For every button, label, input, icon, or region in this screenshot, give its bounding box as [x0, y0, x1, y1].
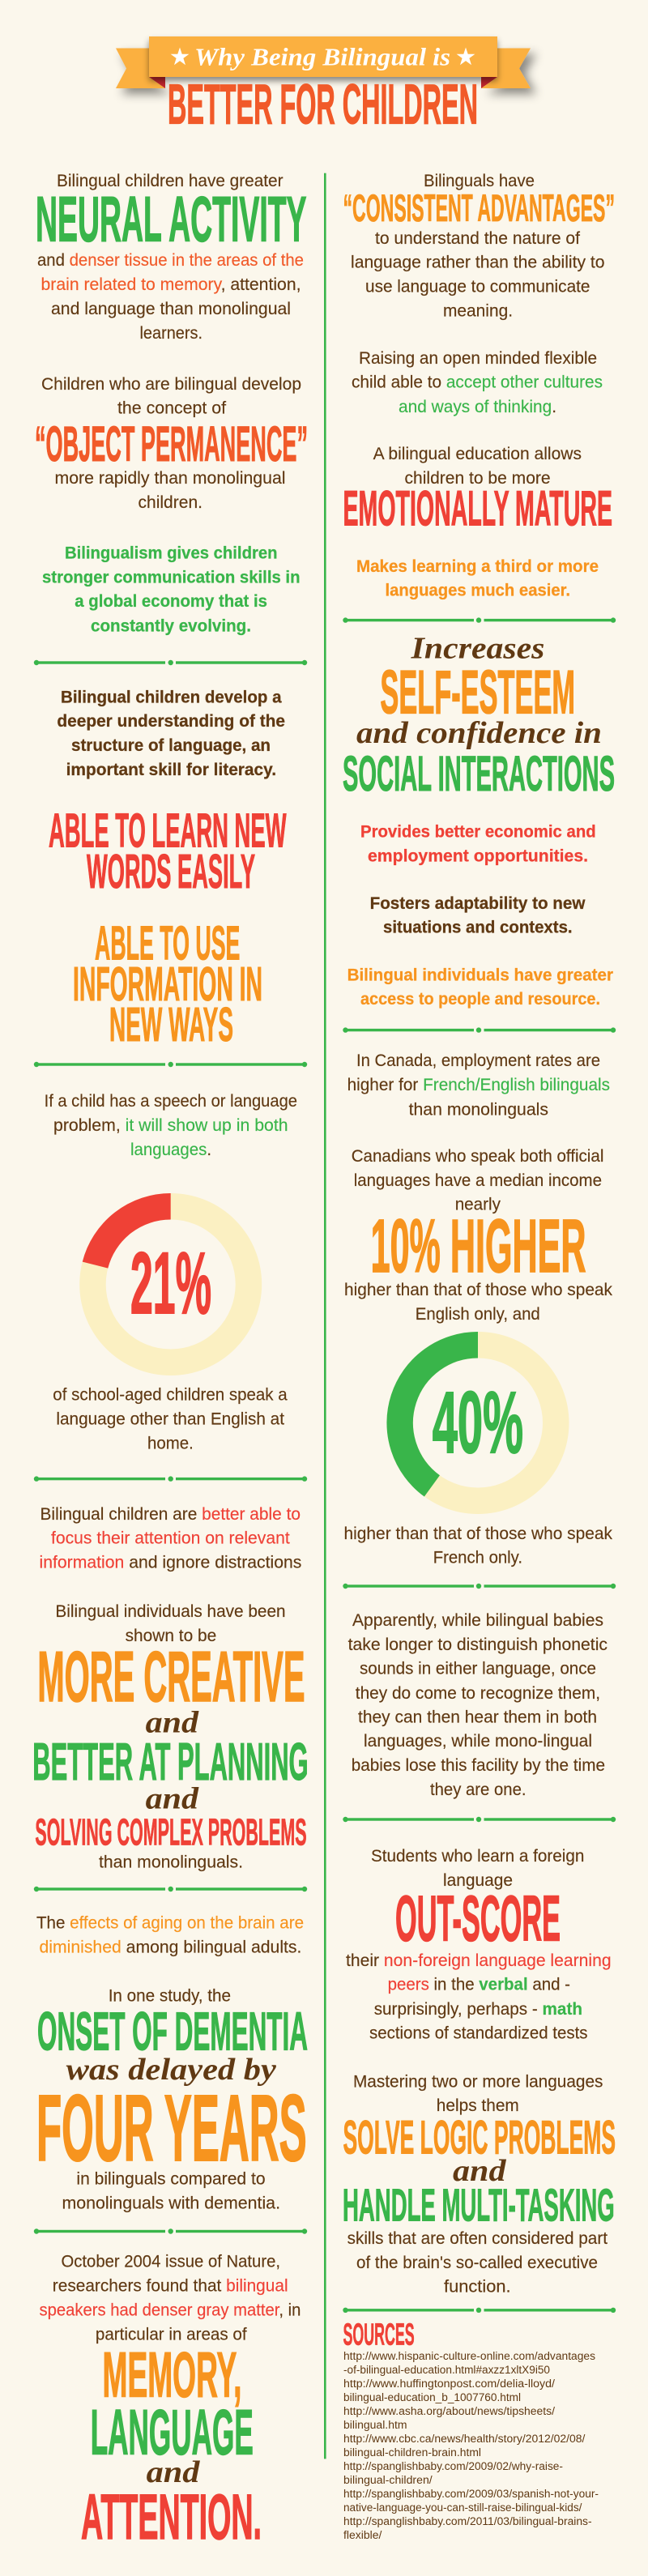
sources list: bilingual-education_b_1007760.html	[343, 2391, 521, 2403]
text block: logic and multi-tasking: Mastering two or more languages	[353, 2072, 603, 2091]
text block: object permanence	[35, 375, 308, 512]
sources list: bilingual-children-brain.html	[343, 2446, 481, 2459]
text block: bilingual babies: they are one.	[430, 1781, 526, 1799]
text block: french only: higher than that of those who speak	[343, 1525, 612, 1543]
text block: speech problem: If a child has a speech or language	[45, 1092, 297, 1111]
text block: bilingual babies: sounds in either language, once	[360, 1660, 596, 1678]
panel: left column: INFORMATION IN	[73, 957, 262, 1011]
divider	[34, 1476, 307, 1482]
ribbon right tail	[481, 49, 531, 88]
text block: logic and multi-tasking	[343, 2072, 616, 2296]
text block: dementia: In one study, the	[109, 1987, 231, 2006]
text block: object permanence: children.	[138, 493, 202, 512]
sources list: -of-bilingual-education.html#axzz1xltX9i50	[343, 2364, 550, 2376]
ribbon left tail	[116, 49, 165, 88]
text block: neural activity: and denser tissue in the areas of the	[37, 251, 304, 270]
text block: out-score: peers in the verbal and -	[388, 1976, 570, 1994]
text block: dementia: was delayed by	[66, 2053, 276, 2087]
sources list: flexible/	[343, 2529, 382, 2541]
text block: logic and multi-tasking: function.	[444, 2278, 511, 2296]
text block: open minded: and ways of thinking.	[399, 398, 556, 416]
sources list: http://spanglishbaby.com/2009/02/why-raise-	[343, 2460, 563, 2472]
text block: economic opportunities: employment opportunities.	[368, 847, 588, 866]
text block: bilingual babies: take longer to distinguish phonetic	[348, 1636, 608, 1654]
sources list: bilingual-children/	[343, 2474, 433, 2486]
text: MORE CREATIVE	[37, 1636, 305, 1717]
text block: logic and multi-tasking: skills that are often considered part	[347, 2229, 608, 2248]
text block: open minded: child able to accept other cultures	[352, 373, 603, 392]
text block: gray matter: researchers found that bilingual	[53, 2276, 288, 2296]
text block: school-aged children: language other than English at	[56, 1410, 284, 1428]
chart: 21 percent donut: 21%	[130, 1234, 211, 1332]
text block: literacy: structure of language, an	[71, 736, 271, 755]
text block: neural activity: and language than monolingual	[51, 300, 291, 318]
text block: adaptability: Fosters adaptability to new	[370, 894, 586, 913]
text block: school-aged children: home.	[147, 1434, 194, 1452]
text block: literacy: deeper understanding of the	[57, 712, 285, 731]
text block: french only: French only.	[433, 1549, 522, 1567]
text block: object permanence: more rapidly than monolingual	[55, 469, 286, 488]
text block: consistent advantages: Bilinguals have	[424, 172, 535, 190]
text block: self-esteem	[343, 631, 615, 801]
divider	[343, 617, 616, 623]
text block: literacy: Bilingual children develop a	[61, 688, 282, 706]
text block: canada employment: higher for French/English bilinguals	[347, 1076, 610, 1094]
text block: aging: diminished among bilingual adults.	[39, 1938, 301, 1957]
text block: canada employment: In Canada, employment rates are	[356, 1051, 600, 1070]
text block: neural activity: brain related to memory, attention,	[40, 275, 301, 294]
text block: french only	[343, 1525, 612, 1567]
text block: 10 percent higher: English only, and	[416, 1305, 540, 1324]
text block: out-score	[346, 1847, 612, 2043]
text block: communication skills: constantly evolving.	[91, 617, 251, 635]
heading: able to use information in new ways: NEW WAYS	[109, 998, 233, 1051]
text block: attention: information and ignore distractions	[39, 1554, 301, 1572]
text block: neural activity: Bilingual children have greater	[57, 172, 284, 190]
text block: bilingual babies	[348, 1611, 608, 1799]
text block: economic opportunities	[360, 823, 596, 866]
icon: right star	[457, 47, 475, 65]
text block: more creative: than monolinguals.	[99, 1853, 243, 1872]
heading: able to use information in new ways: ABLE TO USE	[95, 916, 240, 970]
heading: able to learn new words easily: WORDS EASILY	[87, 845, 255, 898]
chart: 40 percent donut	[400, 1345, 556, 1501]
ribbon main band	[149, 36, 497, 77]
text block: gray matter: and	[147, 2455, 201, 2489]
text: ONSET OF DEMENTIA	[37, 2002, 308, 2062]
chart: 40 percent donut: 40%	[433, 1373, 523, 1471]
text block: access: access to people and resource.	[360, 990, 600, 1009]
chart: 21 percent donut	[92, 1206, 249, 1363]
text block: neural activity: learners.	[139, 324, 202, 343]
text block: bilingual babies: they can then hear them in both	[358, 1708, 597, 1727]
sources list: http://www.cbc.ca/news/health/story/2012/02/08/	[343, 2433, 586, 2445]
text: BETTER AT PLANNING	[32, 1732, 309, 1791]
text block: adaptability: situations and contexts.	[383, 919, 573, 937]
text block: attention: Bilingual children are better able to	[40, 1505, 301, 1524]
text block: bilingual babies: Apparently, while bilingual babies	[352, 1611, 603, 1630]
text block: consistent advantages: use language to communicate	[365, 277, 590, 296]
text block: aging: The effects of aging on the brain are	[36, 1914, 304, 1933]
text block: communication skills: a global economy that is	[75, 592, 267, 611]
text block: gray matter: October 2004 issue of Nature,	[62, 2253, 280, 2271]
ribbon left fold	[149, 77, 165, 88]
text block: literacy	[57, 688, 285, 779]
text block: emotionally mature: A bilingual education allows	[373, 445, 582, 463]
text block: communication skills: stronger communication skills in	[42, 568, 300, 586]
text block: out-score: their non-foreign language learning	[346, 1951, 612, 1970]
sources list: http://spanglishbaby.com/2011/03/bilingual-brains-	[343, 2515, 592, 2527]
divider	[343, 1584, 616, 1589]
text block: communication skills: Bilingualism gives children	[65, 544, 277, 563]
text block: gray matter	[39, 2253, 301, 2553]
text block: consistent advantages: to understand the nature of	[375, 229, 580, 248]
heading: able to learn new words easily	[49, 804, 287, 898]
text block: more creative	[32, 1602, 309, 1872]
text block: school-aged children: of school-aged children speak a	[53, 1386, 288, 1405]
text block: open minded: Raising an open minded flexible	[359, 349, 597, 368]
text block: school-aged children	[53, 1386, 288, 1452]
divider	[343, 2308, 616, 2313]
text block: third language: Makes learning a third or more	[356, 557, 599, 576]
panel: right column	[343, 172, 616, 2541]
sources list: http://spanglishbaby.com/2009/03/spanish-not-your-	[343, 2488, 599, 2500]
sources list: http://www.asha.org/about/news/tipsheets/	[343, 2405, 555, 2417]
text block: economic opportunities: Provides better economic and	[360, 823, 596, 842]
divider	[34, 1887, 307, 1891]
divider	[34, 1062, 307, 1067]
text block: third language: languages much easier.	[386, 582, 570, 599]
text block: 10 percent higher	[344, 1147, 612, 1324]
heading: able to use information in new ways	[73, 916, 262, 1051]
text block: attention: focus their attention on relevant	[51, 1529, 290, 1548]
icon: left star	[171, 47, 189, 65]
text block: attention	[39, 1505, 301, 1572]
text block: out-score: language	[443, 1871, 513, 1890]
text block: 10 percent higher: nearly	[455, 1196, 501, 1214]
text block: literacy: important skill for literacy.	[66, 761, 276, 779]
divider	[34, 660, 307, 665]
text block: logic and multi-tasking: and	[453, 2154, 507, 2188]
text block: more creative: Bilingual individuals have been	[55, 1602, 286, 1621]
text block: communication skills	[42, 544, 300, 635]
text block: gray matter: LANGUAGE	[91, 2395, 254, 2467]
text block: bilingual babies: they do come to recognize them,	[356, 1684, 600, 1703]
text block: 10 percent higher: higher than that of those who speak	[344, 1281, 612, 1299]
text block: out-score: sections of standardized tests	[369, 2024, 588, 2043]
column divider	[324, 173, 326, 2459]
text block: dementia: in bilinguals compared to	[76, 2170, 266, 2189]
text block: access	[347, 966, 613, 1009]
text block: dementia	[36, 1987, 308, 2213]
text block: speech problem: problem, it will show up in both	[53, 1116, 288, 1135]
text block: more creative: and	[146, 1706, 199, 1740]
title line one: Why Being Bilingual is	[194, 42, 450, 71]
header banner	[116, 36, 531, 136]
text block: gray matter: particular in areas of	[96, 2325, 247, 2344]
sources list	[343, 2350, 599, 2541]
text block: consistent advantages: meaning.	[443, 301, 513, 321]
text block: canada employment: than monolinguals	[409, 1100, 548, 1119]
text block: third language	[356, 557, 599, 599]
text block: access: Bilingual individuals have greater	[347, 966, 613, 984]
text: “OBJECT PERMANENCE”	[35, 416, 308, 471]
divider	[343, 1027, 616, 1033]
text: NEURAL ACTIVITY	[36, 183, 306, 254]
divider	[343, 1817, 616, 1822]
text block: open minded	[352, 349, 603, 416]
text block: emotionally mature: children to be more	[405, 469, 551, 488]
text block: gray matter: MEMORY,	[102, 2338, 241, 2410]
text block: bilingual babies: languages, while mono-lingual	[364, 1732, 592, 1751]
text block: bilingual babies: babies lose this facility by the time	[352, 1756, 605, 1775]
text block: adaptability	[370, 894, 586, 937]
text block: object permanence: the concept of	[117, 399, 226, 418]
text block: consistent advantages: language rather than the ability to	[351, 254, 604, 272]
text block: dementia: monolinguals with dementia.	[62, 2194, 280, 2213]
text block: self-esteem: Increases	[411, 631, 544, 665]
text block: out-score: Students who learn a foreign	[371, 1847, 584, 1866]
text block: canada employment	[347, 1051, 610, 1119]
sources: SOURCES	[343, 2318, 415, 2352]
text block: 10 percent higher: Canadians who speak both official	[352, 1147, 603, 1166]
text block: self-esteem: and confidence in	[356, 716, 602, 750]
text block: gray matter: speakers had denser gray matter, in	[39, 2301, 301, 2320]
text block: aging	[36, 1914, 304, 1957]
text block: more creative: shown to be	[126, 1627, 216, 1645]
text block: 10 percent higher: languages have a median income	[354, 1171, 602, 1190]
ribbon right fold	[481, 77, 497, 88]
text block: logic and multi-tasking: helps them	[437, 2096, 519, 2115]
text block: gray matter: ATTENTION.	[81, 2480, 262, 2553]
text: SOLVING COMPLEX PROBLEMS	[35, 1811, 307, 1853]
text block: more creative: and	[146, 1782, 199, 1816]
sources list: native-language-you-can-still-raise-bilingual-kids/	[343, 2501, 582, 2514]
text block: object permanence: Children who are bilingual develop	[41, 375, 301, 394]
divider	[34, 2228, 307, 2234]
sources list: http://www.hispanic-culture-online.com/advantages	[343, 2350, 595, 2362]
sources list: http://www.huffingtonpost.com/delia-lloyd/	[343, 2378, 555, 2390]
text block: speech problem: languages.	[130, 1141, 211, 1159]
sources list: bilingual.htm	[343, 2419, 407, 2431]
text block: neural activity	[36, 172, 306, 343]
text: FOUR YEARS	[36, 2075, 307, 2181]
panel: left column	[32, 172, 309, 2553]
text block: speech problem	[45, 1092, 297, 1159]
text block: emotionally mature	[343, 445, 612, 535]
text block: logic and multi-tasking: of the brain's so-called executive	[356, 2254, 598, 2272]
text block: out-score: surprisingly, perhaps - math	[374, 2000, 582, 2019]
panel: left column: ABLE TO LEARN NEW	[49, 804, 287, 857]
text block: consistent advantages	[343, 172, 615, 321]
sources	[343, 2318, 599, 2541]
